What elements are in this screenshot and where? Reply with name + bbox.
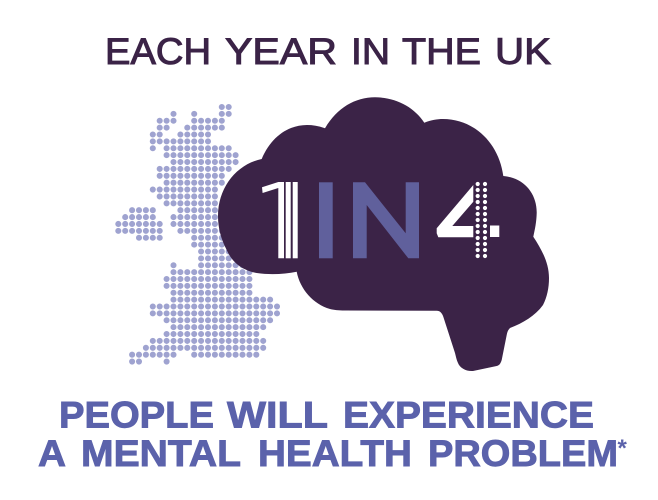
digit 1 striped bbox=[262, 182, 298, 258]
statement text bbox=[38, 394, 628, 474]
line two: A bbox=[38, 432, 66, 474]
brain shape bbox=[218, 97, 549, 371]
dotted map of the UK bbox=[118, 107, 277, 362]
title bbox=[105, 31, 552, 72]
line one: WILL bbox=[227, 394, 328, 436]
line one: EXPERIENCE bbox=[343, 394, 594, 436]
line two: MENTAL bbox=[81, 432, 241, 474]
line one bbox=[59, 394, 594, 436]
digit 4 with dots bbox=[437, 184, 499, 256]
line two bbox=[38, 432, 618, 474]
letters IN bbox=[319, 182, 419, 258]
title: YEAR bbox=[225, 31, 337, 72]
title: UK bbox=[495, 31, 552, 72]
title: THE bbox=[402, 31, 481, 72]
asterisk: * bbox=[618, 435, 628, 462]
title: EACH bbox=[105, 31, 211, 72]
line one: PEOPLE bbox=[59, 394, 214, 436]
1 IN 4 figure bbox=[262, 182, 499, 258]
line two: HEALTH bbox=[258, 432, 412, 474]
line two: PROBLEM bbox=[428, 432, 618, 474]
title: IN bbox=[351, 31, 390, 72]
